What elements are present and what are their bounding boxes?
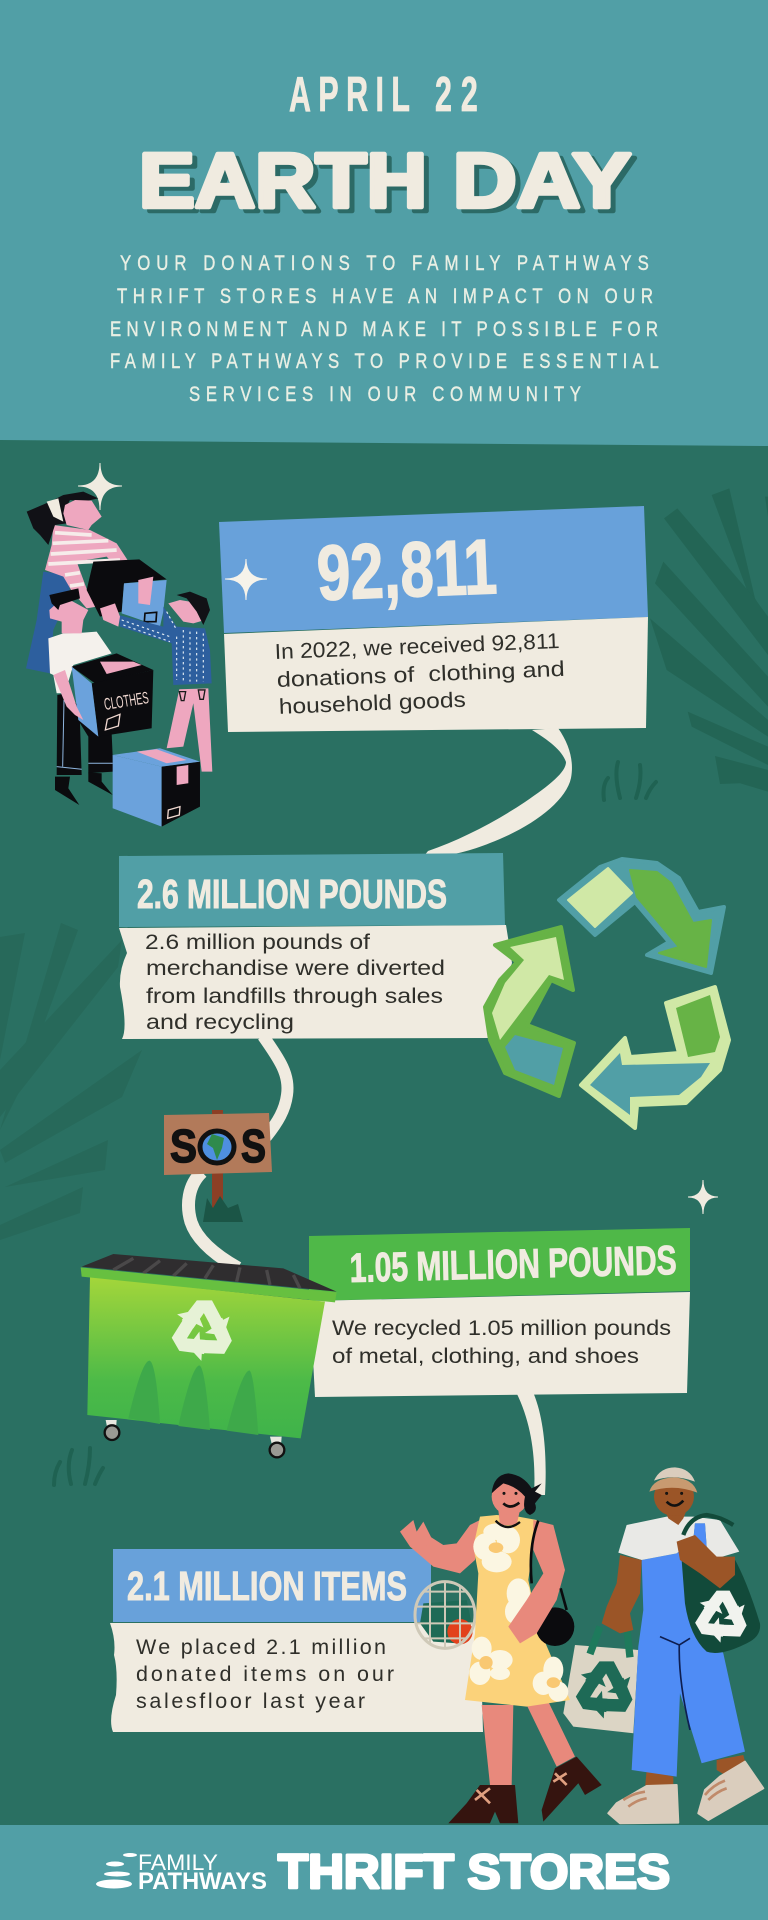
top arrow xyxy=(559,859,724,973)
connector ribbon 1 xyxy=(424,728,572,856)
bottom arrow head xyxy=(590,1053,710,1115)
clothes box stripe xyxy=(100,662,142,674)
shirt pattern xyxy=(122,612,203,682)
panel text: We placed 2.1 million xyxy=(136,1635,386,1659)
man shirt patch xyxy=(693,1523,707,1547)
woman left arm xyxy=(410,1520,480,1573)
boy left trousers xyxy=(57,693,113,775)
dress flowers xyxy=(469,1523,568,1702)
flower centers xyxy=(479,1542,560,1688)
left arrow head xyxy=(492,937,564,1040)
lid ridges xyxy=(113,1258,300,1288)
dark green bag xyxy=(682,1557,760,1653)
illustration: shoppers with reusable bags xyxy=(400,1467,763,1823)
connector ribbon 3 xyxy=(517,1392,546,1495)
sign grass xyxy=(203,1196,243,1222)
panel text: In 2022, we received 92,811 xyxy=(274,629,560,664)
recycle symbol on bin xyxy=(163,1300,239,1369)
man face xyxy=(666,1493,683,1506)
crossbody strap xyxy=(531,1521,567,1610)
top arrow tail xyxy=(568,868,632,927)
panel body cream xyxy=(224,617,648,732)
heading: 2.1 MILLION ITEMS xyxy=(127,1563,407,1609)
man leg one xyxy=(645,1770,673,1788)
panel text: We recycled 1.05 million pounds xyxy=(332,1316,671,1340)
box handle xyxy=(168,807,180,818)
crossbody bag xyxy=(536,1607,574,1646)
globe land xyxy=(207,1134,224,1160)
connector ribbon 2 upper xyxy=(263,1036,288,1137)
woman hair xyxy=(492,1473,542,1515)
bottom arrow xyxy=(581,987,729,1128)
panel text xyxy=(136,1635,394,1713)
globe xyxy=(200,1131,234,1163)
woman hand on box xyxy=(138,577,153,605)
logo family: FAMILY xyxy=(138,1850,218,1875)
title date xyxy=(289,67,478,122)
palm leaves left xyxy=(0,923,142,1240)
right S: S xyxy=(241,1120,266,1172)
panel text: 2.6 million pounds of xyxy=(145,930,370,954)
small box tape xyxy=(137,749,187,763)
intro text: SERVICES IN OUR COMMUNITY xyxy=(189,383,581,407)
bin lid xyxy=(82,1254,337,1292)
sign post xyxy=(212,1110,223,1208)
panel text xyxy=(145,930,445,1034)
panel body cream xyxy=(110,1623,483,1732)
woman right arm xyxy=(508,1520,565,1643)
box tag xyxy=(105,714,120,730)
woman face xyxy=(63,500,102,530)
bin rim xyxy=(81,1267,337,1302)
logo pathways: PATHWAYS xyxy=(138,1868,267,1895)
panel: 1.05 million pounds xyxy=(309,1228,690,1397)
panel header green xyxy=(309,1228,690,1301)
logo stones xyxy=(96,1853,137,1888)
tote handles xyxy=(590,1627,630,1657)
box label xyxy=(144,612,157,622)
panel text: from landfills through sales xyxy=(146,984,443,1008)
shoe laces xyxy=(623,1781,727,1807)
panel text: donations of clothing and xyxy=(276,657,565,692)
panel header teal xyxy=(119,853,505,927)
title: Earth Day: DAY xyxy=(458,142,636,228)
top box side xyxy=(87,559,167,617)
sparkle top xyxy=(78,463,122,510)
heading: 2.6 MILLION POUNDS xyxy=(137,871,447,917)
connector ribbon 2 lower xyxy=(189,1172,238,1268)
clothes label: CLOTHES xyxy=(103,688,150,714)
man hat band xyxy=(649,1477,697,1493)
boot laces xyxy=(475,1773,567,1803)
grass tuft left xyxy=(54,1448,103,1485)
woman hair xyxy=(27,492,98,545)
boy right hair xyxy=(177,592,210,625)
panel: 2.1 million items xyxy=(110,1549,483,1732)
panel text: donated items on our xyxy=(136,1662,394,1686)
bag strap xyxy=(683,1515,733,1535)
woman skirt xyxy=(26,572,70,673)
man right arm xyxy=(677,1535,735,1588)
clothes box side xyxy=(72,667,98,737)
boy right hand xyxy=(100,603,120,627)
boy left shoe one xyxy=(55,777,79,805)
tote bag xyxy=(563,1645,638,1733)
man left arm xyxy=(602,1555,642,1633)
boy left shirt xyxy=(48,632,112,693)
small box flap xyxy=(177,765,188,785)
trouser pockets xyxy=(179,690,205,701)
header band xyxy=(0,0,768,446)
net bag xyxy=(415,1582,475,1648)
illustration: family with donation boxes xyxy=(26,492,212,827)
panel body cream xyxy=(310,1292,690,1397)
panel text: salesfloor last year xyxy=(136,1689,365,1713)
title: Earth Day: EARTH xyxy=(139,138,427,224)
tote recycle icon xyxy=(568,1661,640,1726)
panel text: and recycling xyxy=(146,1010,294,1034)
panel: 92,811 donations xyxy=(219,506,648,732)
necklace xyxy=(496,1521,520,1527)
title: Earth Day xyxy=(139,138,636,228)
man shirt xyxy=(618,1517,739,1560)
footer logo xyxy=(96,1850,267,1895)
panel text xyxy=(332,1316,671,1368)
left arrow tail xyxy=(505,1035,563,1085)
trouser seam xyxy=(57,700,113,769)
boy right face xyxy=(168,600,205,623)
boy left arm xyxy=(53,670,83,720)
intro text: THRIFT STORES HAVE AN IMPACT ON OUR xyxy=(117,285,653,309)
clothes box front xyxy=(92,670,153,737)
woman leg one xyxy=(482,1705,513,1785)
woman dress xyxy=(465,1515,570,1707)
small box left xyxy=(113,755,162,827)
woman forearm xyxy=(75,590,97,608)
boy left hair xyxy=(49,588,80,610)
bottom arrow tail xyxy=(676,995,720,1057)
left S: S xyxy=(170,1120,197,1172)
man hat top xyxy=(654,1467,695,1482)
man head xyxy=(654,1477,694,1516)
bin ridges xyxy=(128,1361,258,1435)
panel header blue xyxy=(219,506,648,633)
intro text: FAMILY PATHWAYS TO PROVIDE ESSENTIAL xyxy=(110,350,659,374)
woman left boot xyxy=(448,1785,518,1823)
shirt stripes xyxy=(48,533,120,586)
palm leaves right xyxy=(650,488,768,792)
panel text: merchandise were diverted xyxy=(146,956,445,980)
woman shirt xyxy=(45,525,138,597)
bin wheels xyxy=(105,1420,284,1457)
panel header blue xyxy=(113,1549,431,1622)
footer band xyxy=(0,1825,768,1920)
panel body cream xyxy=(119,925,512,1039)
panel text: of metal, clothing, and shoes xyxy=(332,1344,639,1368)
panel text: household goods xyxy=(278,688,466,719)
panel: 2.6 million pounds xyxy=(119,853,512,1039)
bag recycle icon xyxy=(688,1591,753,1650)
title date: APRIL xyxy=(289,67,410,122)
man neck xyxy=(665,1510,687,1525)
man left shoe xyxy=(608,1785,678,1823)
intro text: YOUR DONATIONS TO FAMILY PATHWAYS xyxy=(120,252,649,276)
woman leg two xyxy=(527,1702,575,1767)
top arrow head xyxy=(630,870,711,967)
top box front xyxy=(122,580,167,627)
title: Earth Day: DAY xyxy=(453,138,631,224)
intro text: ENVIRONMENT AND MAKE IT POSSIBLE FOR xyxy=(110,318,658,342)
sign: SOS xyxy=(164,1110,272,1222)
title date: 22 xyxy=(435,67,478,122)
intro text xyxy=(110,252,659,407)
sparkle right xyxy=(688,1180,718,1214)
bin body xyxy=(87,1277,325,1438)
woman head xyxy=(492,1478,528,1515)
big number: 92,811 xyxy=(315,522,499,617)
footer title: THRIFT STORES xyxy=(278,1846,670,1899)
boy right trousers xyxy=(167,688,212,772)
title: Earth Day: EARTH xyxy=(144,142,432,228)
clothes box top xyxy=(72,653,153,683)
boy right shirt xyxy=(118,607,212,685)
grass tuft right xyxy=(604,762,656,800)
icon: recycle arrows xyxy=(485,859,729,1128)
man leg two xyxy=(717,1755,745,1775)
left arrow xyxy=(485,927,574,1096)
boy left face xyxy=(49,600,88,633)
woman hand xyxy=(400,1520,433,1550)
sign board xyxy=(164,1113,272,1175)
woman right boot xyxy=(542,1757,602,1822)
woman neck xyxy=(498,1510,520,1525)
man overalls xyxy=(632,1533,745,1777)
boy left shoe two xyxy=(88,773,113,795)
illustration: green recycling bin xyxy=(81,1254,337,1457)
small box top xyxy=(113,748,200,767)
panel text xyxy=(274,629,566,719)
sparkle in panel xyxy=(225,559,267,600)
man right shoe xyxy=(698,1762,763,1820)
overalls seam xyxy=(660,1637,690,1730)
small box right xyxy=(162,762,200,827)
hair clip xyxy=(47,498,63,522)
woman face xyxy=(503,1493,519,1507)
